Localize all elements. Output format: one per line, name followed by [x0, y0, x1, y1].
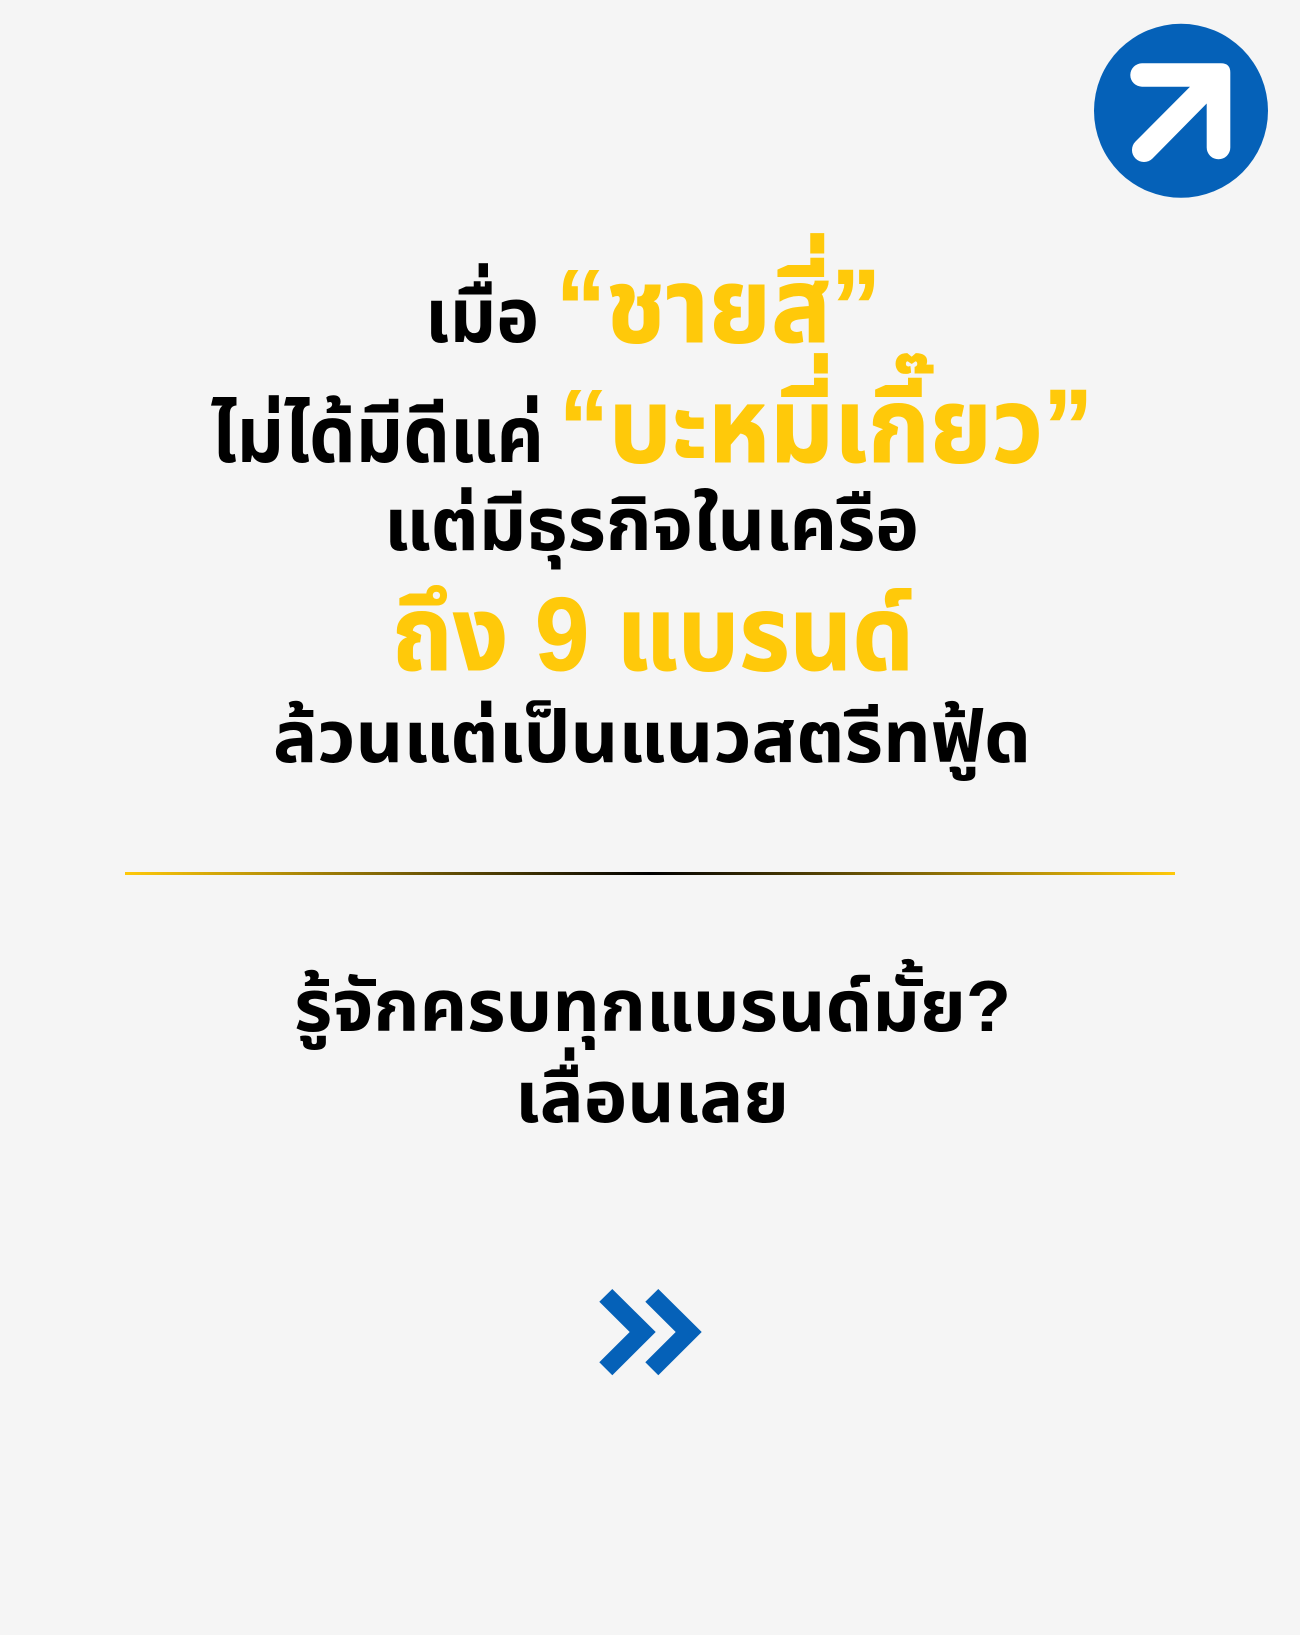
icon: double chevron	[599, 1289, 702, 1375]
heading line 5: ล้วนแต่เป็นแนวสตรีทฟู้ด	[273, 698, 1031, 781]
heading line 4: highlighted: ถึง 9 แบรนด์	[392, 577, 914, 693]
heading line 1	[425, 234, 881, 365]
question line 2: เลื่อนเลย	[515, 1047, 789, 1138]
divider	[125, 872, 1175, 875]
icon: logo circle with arrow	[1094, 24, 1268, 198]
heading line 1: เมื่อ	[425, 263, 539, 359]
heading line 2	[211, 354, 1093, 485]
heading line 2: “บะหมี่เกี๊ยว”	[559, 354, 1093, 485]
question line 1: รู้จักครบทุกแบรนด์มั้ย?	[294, 959, 1011, 1050]
heading line 3: แต่มีธุรกิจในเครือ	[384, 483, 919, 570]
heading line 2: ไม่ได้มีดีแค่	[211, 391, 544, 479]
heading line 1: “ชายสี่”	[556, 234, 881, 365]
